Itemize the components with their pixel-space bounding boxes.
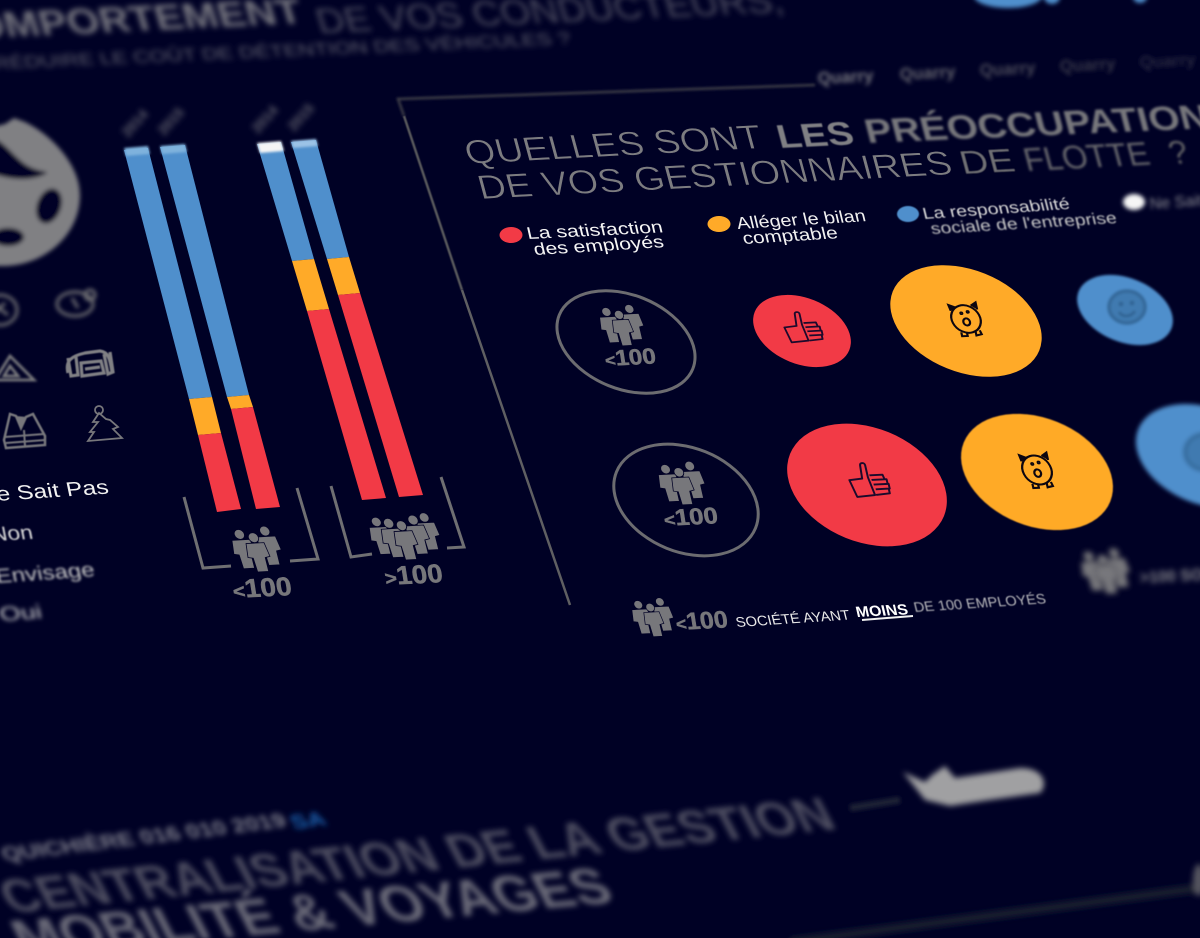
heading: centralisation: CENTRALISATION DE LA GESTION <box>0 788 844 923</box>
years row (out of focus) <box>817 50 1196 88</box>
legend: social responsibility <box>897 195 1119 238</box>
top heading (out of focus): RÉDUIRE LE COÛT DE DÉTENTION DES VÉHICULES ? <box>0 28 572 73</box>
heading: QUELLES SONT <box>460 119 767 172</box>
footnote: more than 100 employees (out of focus) <box>1076 548 1200 595</box>
bracket group >100: >100 <box>382 558 445 591</box>
bar 1 <100 <box>124 146 241 512</box>
years row (out of focus): Quarry <box>817 66 874 88</box>
row 2: social responsibility bubble <box>1120 385 1200 527</box>
row 2: company size ring: <100 <box>662 502 720 531</box>
row 2: satisfaction bubble <box>769 401 965 569</box>
bar labels (out of focus) <box>118 100 317 140</box>
eyebrow <box>0 808 330 866</box>
row 1: company size ring <box>542 271 710 413</box>
panel: fleet manager concerns <box>398 50 1200 638</box>
legend: satisfaction <box>500 217 666 259</box>
top heading (out of focus) <box>0 0 788 73</box>
legend: balance sheet: Alléger le bilan <box>734 205 868 233</box>
heading <box>460 96 1200 207</box>
legend: social responsibility: La responsabilité <box>921 195 1072 223</box>
icon: warning triangle <box>0 356 34 380</box>
dash to plane <box>850 800 900 808</box>
footnote: fewer than 100 employees: DE 100 EMPLOYÉS <box>912 591 1047 615</box>
row 1: satisfaction bubble <box>742 281 862 381</box>
bar labels (out of focus): 2015 <box>284 100 317 134</box>
heading: ? <box>1164 135 1192 172</box>
bracket group >100 <box>331 477 464 591</box>
eyebrow: QUICHIÈRE 016 010 2019 <box>0 810 290 866</box>
eyebrow: SA <box>286 808 330 834</box>
heading: PRÉOCCUPATIONS <box>860 96 1200 151</box>
footnote: fewer than 100 employees: <100 <box>674 606 730 636</box>
bar 2 <100 <box>160 144 280 509</box>
row 1: social responsibility bubble <box>1067 262 1183 358</box>
legend: balance sheet: comptable <box>740 223 840 248</box>
panel frame <box>398 85 815 605</box>
heading: LES <box>773 116 858 156</box>
bottom-right divider <box>790 864 1200 938</box>
legend: satisfaction: des employés <box>531 231 666 259</box>
icon: plane <box>903 766 1044 806</box>
legend: social responsibility: sociale de l'entreprise <box>929 209 1119 238</box>
heading: FLOTTE <box>1019 136 1154 179</box>
icon: safety vest <box>4 414 45 448</box>
row 2: balance sheet bubble <box>944 392 1130 552</box>
bar labels (out of focus): 2014 <box>118 106 151 140</box>
footnote: fewer than 100 employees: MOINS <box>854 602 910 621</box>
bar labels (out of focus): 2015 <box>154 104 187 138</box>
heading: DE <box>955 143 1019 182</box>
top blue shapes (cropped) <box>974 0 1147 8</box>
icon: christmas tree <box>88 406 122 441</box>
heading: DE VOS GESTIONNAIRES <box>473 145 956 207</box>
row 1: balance sheet bubble <box>874 244 1058 398</box>
legend: balance sheet <box>708 205 868 248</box>
row 2: company size ring <box>597 424 775 576</box>
bar labels (out of focus): 2014 <box>248 102 281 136</box>
bottom section (out of focus) <box>0 766 1200 938</box>
icon: car on lift <box>67 351 113 376</box>
panel: left icons and legend <box>0 118 122 626</box>
footnote: fewer than 100 employees <box>627 591 1047 638</box>
row 1: company size ring: <100 <box>603 344 658 371</box>
bar 4 >100 <box>291 139 423 497</box>
legend: other (out of focus) <box>1123 192 1200 213</box>
bracket group <100: <100 <box>230 571 294 604</box>
icon: small blurred icons top row <box>0 290 95 325</box>
footnote: fewer than 100 employees: SOCIÉTÉ AYANT <box>734 607 852 630</box>
bar 3 >100 <box>257 141 386 500</box>
years row (out of focus): Quarry <box>1059 54 1116 76</box>
chart: stacked bars <box>118 100 464 604</box>
icon: globe <box>0 118 80 266</box>
years row (out of focus): Quarry <box>899 62 956 84</box>
legend text: status answers <box>0 477 111 626</box>
years row (out of focus): Quarry <box>1139 50 1196 72</box>
years row (out of focus): Quarry <box>979 58 1036 80</box>
legend: satisfaction: La satisfaction <box>524 217 665 243</box>
bracket group <100 <box>184 488 318 604</box>
